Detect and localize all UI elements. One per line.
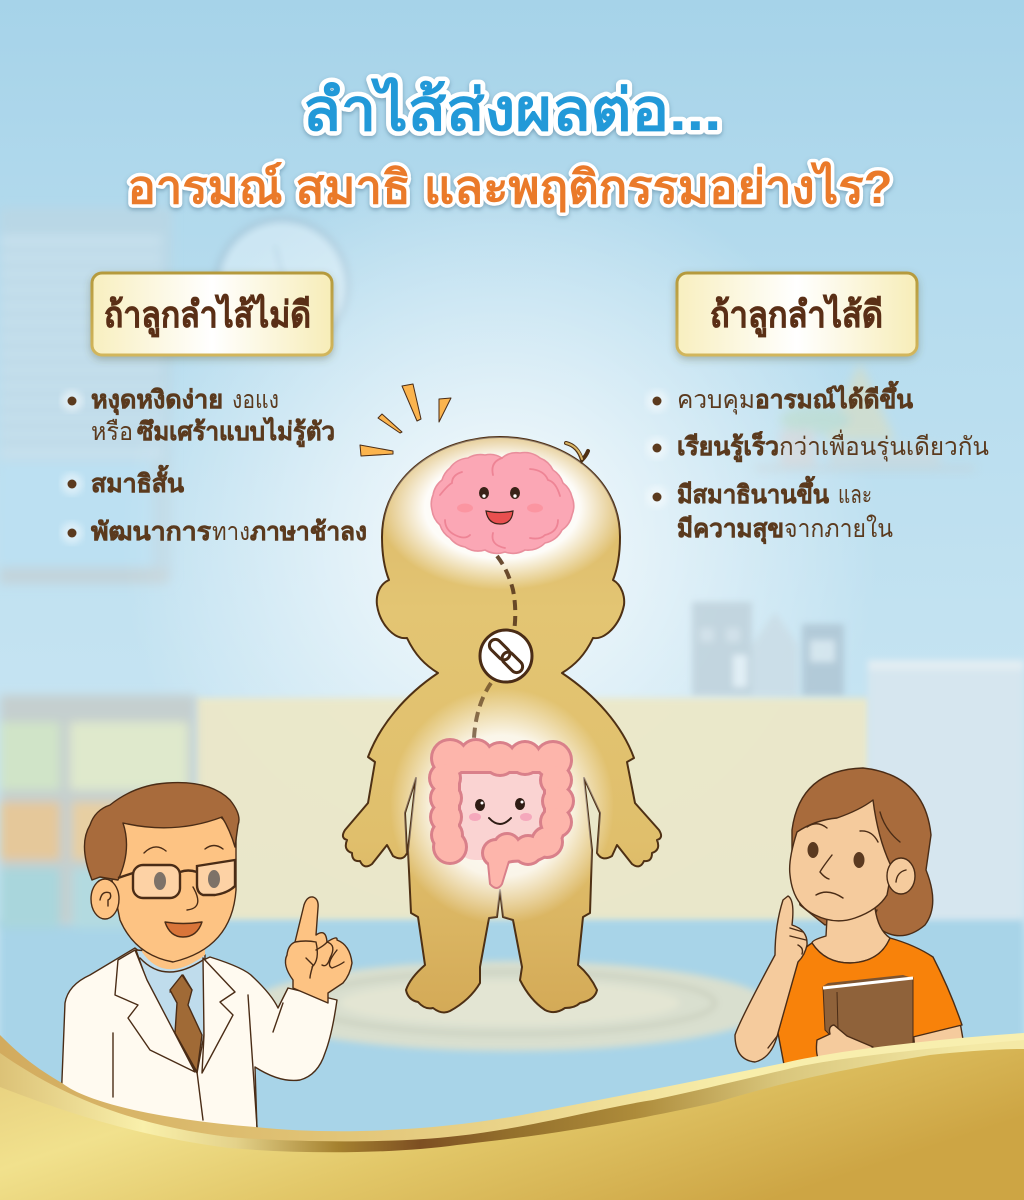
pointing hand xyxy=(285,897,352,1003)
wave top layer xyxy=(0,1033,1024,1200)
bullet item: longer focus and happiness xyxy=(646,475,893,545)
blurred low cabinet xyxy=(0,695,196,928)
hair tuft xyxy=(566,443,588,460)
bullet item: longer focus and happiness: จากภายใน xyxy=(784,514,893,543)
bullet item: irritable xyxy=(61,386,335,448)
tie xyxy=(170,975,202,1072)
ear xyxy=(91,879,119,919)
ear xyxy=(887,858,915,894)
title line 2: อารมณ์ สมาธิ และพฤติกรรมอย่างไร? xyxy=(128,161,893,213)
hair back xyxy=(792,768,933,936)
baby figure xyxy=(343,420,661,1012)
gold wave footer xyxy=(0,1033,1024,1200)
hair xyxy=(84,783,239,880)
glasses xyxy=(118,860,235,898)
blurred rug xyxy=(250,961,770,1051)
shirt xyxy=(136,950,205,1073)
intestine character xyxy=(428,738,575,888)
glow spots xyxy=(382,437,620,922)
title xyxy=(128,77,893,213)
lapels xyxy=(115,950,195,1072)
face xyxy=(790,800,892,921)
right forearm xyxy=(913,1022,964,1050)
bullet item: irritable: หงุดหงิดง่าย xyxy=(91,386,223,416)
bullet item: learns faster: กว่าเพื่อนรุ่นเดียวกัน xyxy=(779,429,989,462)
bullet item: irritable: ซึมเศร้าแบบไม่รู้ตัว xyxy=(137,416,335,448)
raised arm xyxy=(735,896,807,1062)
book xyxy=(823,975,913,1050)
bullet item: longer focus and happiness: มีความสุข xyxy=(677,515,784,545)
panel: bad gut heading: ถ้าลูกลำไส้ไม่ดี xyxy=(104,293,311,338)
bullet item: learns faster xyxy=(646,429,989,463)
brows nose mouth xyxy=(144,846,223,910)
panel: good gut heading: ถ้าลูกลำไส้ดี xyxy=(710,293,883,338)
doctor character xyxy=(60,783,352,1130)
bullet item: slow language: ทาง xyxy=(212,518,250,546)
lab coat xyxy=(60,948,337,1130)
bullet item: emotion control xyxy=(646,380,913,415)
wave middle ribbon xyxy=(0,1040,1024,1200)
bullet item: emotion control: ควบคุม xyxy=(677,386,755,415)
blurred wall panel xyxy=(195,698,870,923)
hand on book xyxy=(816,1025,873,1062)
wave base layer xyxy=(0,1049,1024,1200)
blurred plant and shelf xyxy=(755,362,975,468)
neck xyxy=(812,908,890,963)
icon: chain link xyxy=(480,630,532,682)
mother character xyxy=(735,768,964,1075)
panel: good gut heading xyxy=(677,273,917,355)
bullet item: irritable: หรือ xyxy=(91,418,133,446)
blurred book shelf xyxy=(692,602,844,696)
bullet item: slow language: พัฒนาการ xyxy=(91,518,212,546)
blurred floor xyxy=(0,920,1024,1140)
bullet item: slow language: ภาษาช้าลง xyxy=(250,518,367,546)
face xyxy=(112,815,236,962)
list: bad gut effects xyxy=(61,386,367,546)
icon: attention rays xyxy=(360,384,451,456)
list: good gut effects xyxy=(646,380,989,545)
bullet item: short attention: สมาธิสั้น xyxy=(91,464,184,498)
title line 1: ลำไส้ส่งผลต่อ... xyxy=(302,77,722,143)
blurred white cabinet xyxy=(868,660,1024,930)
panel: bad gut heading xyxy=(92,273,332,355)
bullet item: learns faster: เรียนรู้เร็ว xyxy=(677,431,779,463)
facial features xyxy=(808,842,818,858)
neck xyxy=(142,940,205,969)
orange shirt xyxy=(778,938,962,1075)
brain character xyxy=(431,453,574,553)
blurred window xyxy=(0,208,172,584)
bullet item: emotion control: อารมณ์ได้ดีขึ้น xyxy=(755,380,913,414)
bullet item: longer focus and happiness: และ xyxy=(838,481,872,509)
body silhouette xyxy=(343,437,661,1012)
dashed link to gut xyxy=(497,556,515,632)
bullet item: short attention xyxy=(61,464,184,498)
bullet item: longer focus and happiness: มีสมาธินานขึ้น xyxy=(677,475,829,509)
bullet item: slow language xyxy=(61,518,367,546)
bullet item: irritable: งอแง xyxy=(232,386,279,414)
blurred clock xyxy=(216,219,348,351)
